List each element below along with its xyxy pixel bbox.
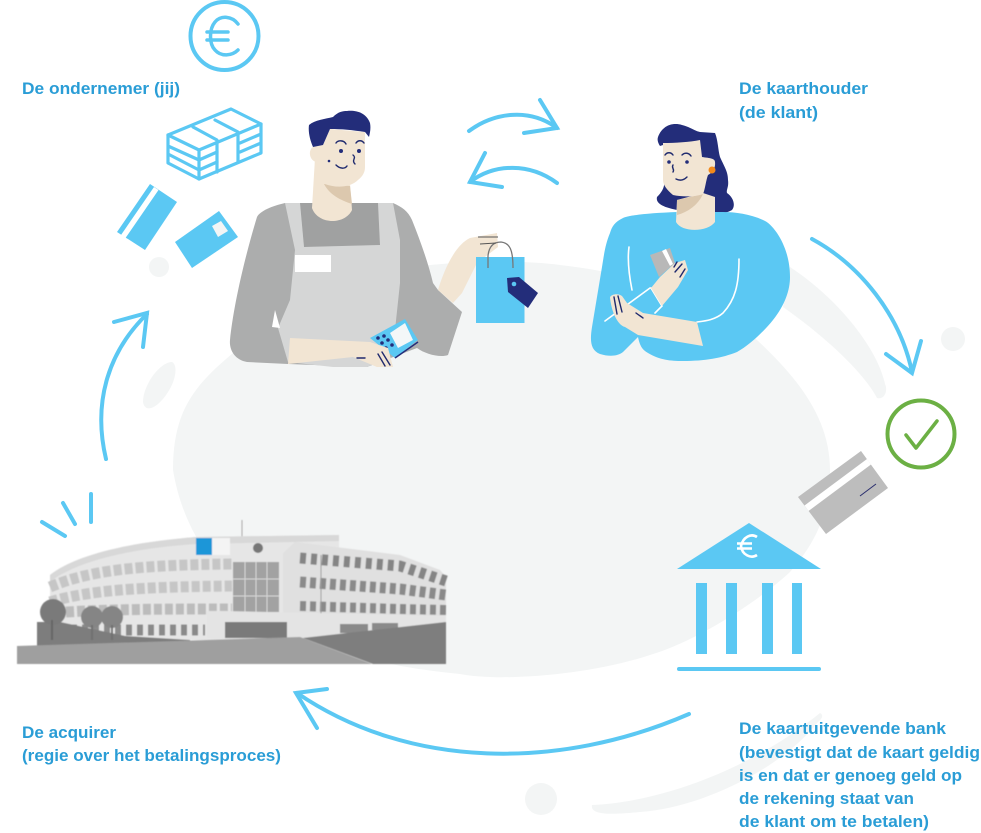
round ornament — [253, 543, 263, 553]
sweater folds — [605, 247, 739, 322]
label: de kaartuitgevende bank: de klant om te betalen) — [739, 813, 929, 831]
face — [663, 140, 715, 196]
label: de kaartuitgevende bank: De kaartuitgevende bank — [739, 720, 947, 738]
payment terminal — [370, 319, 418, 358]
label: de kaarthouder: De kaarthouder — [739, 80, 869, 98]
label: de acquirer — [22, 724, 281, 765]
sweater — [591, 212, 790, 361]
trees and hedge — [37, 622, 190, 648]
logo sign — [196, 538, 212, 555]
neck — [676, 193, 715, 230]
sweater — [230, 203, 462, 367]
shopping bag — [476, 242, 538, 323]
label: de kaartuitgevende bank: (bevestigt dat de kaart geldig — [739, 744, 980, 762]
photo: acquirer office building — [17, 520, 446, 664]
head — [310, 129, 365, 187]
icon: euro coin — [190, 2, 258, 70]
label: de klant: (de klant) — [739, 104, 818, 122]
neck — [312, 158, 352, 221]
arrow: top right — [469, 100, 557, 133]
icon: attention rays — [42, 494, 91, 536]
arrow: bank to acquirer — [296, 689, 689, 754]
card in hand — [650, 248, 675, 277]
forearm and hand — [288, 338, 393, 367]
lawn — [303, 622, 446, 664]
icon: grey bank card — [798, 451, 888, 534]
label: de acquirer: (regie over het betalingsproces) — [22, 747, 281, 765]
label: de kaartuitgevende bank — [739, 720, 980, 831]
label: de kaartuitgevende bank: is en dat er genoeg geld op — [739, 767, 962, 785]
icon: card with stripe — [117, 184, 177, 250]
upper hand — [651, 260, 688, 306]
name badge — [295, 255, 331, 272]
earring — [708, 166, 716, 174]
icon: bank — [677, 523, 821, 671]
right wing — [283, 542, 446, 632]
curved wing — [50, 535, 339, 640]
lower arm and hand — [610, 294, 703, 346]
illustration: cardholder — [591, 124, 790, 361]
icon: card with chip — [175, 211, 238, 268]
icon: green check — [888, 400, 954, 468]
chest — [300, 203, 380, 247]
apron — [278, 203, 400, 367]
label: de ondernemer: De ondernemer (jij) — [22, 80, 180, 98]
glass atrium — [233, 562, 279, 612]
arrow: top left — [470, 153, 557, 187]
entrance block — [207, 611, 446, 638]
background blob — [143, 257, 965, 815]
illustration: merchant — [230, 111, 538, 367]
road — [17, 637, 372, 664]
label: de kaartuitgevende bank: de rekening staat van — [739, 790, 914, 808]
hair — [657, 124, 734, 213]
label: de acquirer: De acquirer — [22, 724, 117, 742]
arrow: acquirer to merchant — [101, 313, 147, 459]
window rows curved wing — [50, 564, 232, 587]
arrow: customer to bank — [812, 239, 921, 373]
icon: stack of banknotes — [168, 109, 261, 179]
hair — [309, 111, 370, 147]
